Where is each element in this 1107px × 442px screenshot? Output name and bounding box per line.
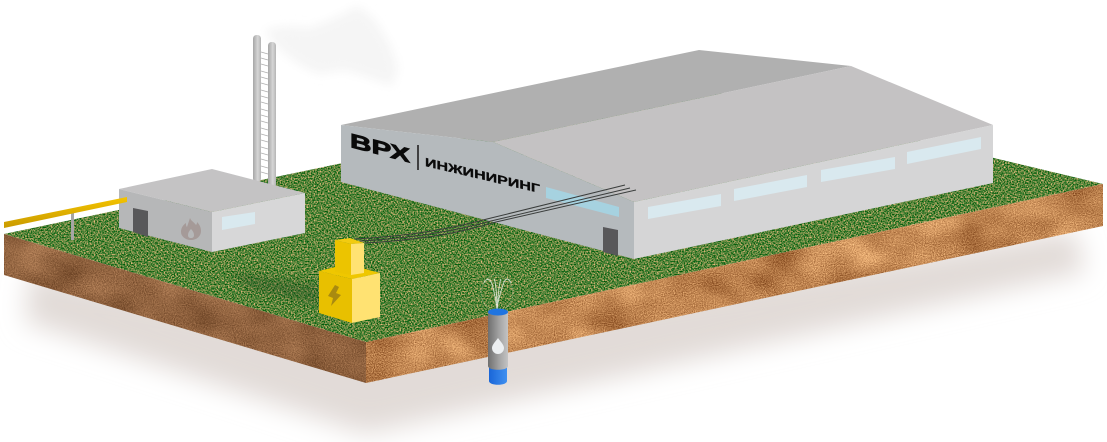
door [133, 208, 148, 237]
grass top [0, 85, 1107, 345]
soil left face [0, 230, 370, 386]
blue base [489, 366, 507, 385]
right wall [212, 193, 305, 252]
icon: flame [181, 218, 201, 240]
ground shadow [25, 230, 1085, 434]
logo text: ВРХ: ВРХ [350, 130, 411, 168]
gas pipe support [71, 212, 74, 240]
lower box top [319, 264, 380, 279]
chimney left [253, 35, 261, 182]
fountain [481, 275, 513, 311]
main factory building [341, 50, 993, 259]
grey casing [488, 312, 508, 370]
dark roof slope [341, 50, 851, 142]
ladder [261, 52, 268, 174]
soil right face [362, 180, 1107, 386]
upper box right [351, 243, 364, 275]
lower box left [319, 271, 352, 323]
smoke from chimneys [264, 6, 398, 86]
window [222, 212, 255, 230]
left wall [119, 189, 212, 252]
water well [481, 275, 513, 385]
icon: water drop [492, 338, 504, 354]
chimney right [268, 42, 276, 188]
upper box top [335, 238, 364, 244]
windows [648, 137, 981, 219]
light roof slope [493, 66, 993, 202]
upper box left [335, 240, 351, 275]
icon: lightning bolt [328, 285, 341, 306]
right wall [634, 125, 993, 259]
left wall [341, 125, 634, 259]
door [603, 227, 618, 256]
side window [546, 187, 619, 217]
gas pipe [4, 197, 127, 228]
transformer [319, 238, 380, 323]
chimneys with ladder [253, 35, 276, 188]
roof [119, 169, 305, 212]
ground block [0, 85, 1107, 386]
top opening [488, 308, 508, 316]
boiler house [119, 169, 305, 252]
lower box right [352, 273, 380, 323]
power lines [355, 185, 636, 243]
logo divider [417, 145, 419, 170]
logo text: инжиниринг: ИНЖИНИРИНГ [425, 155, 540, 196]
